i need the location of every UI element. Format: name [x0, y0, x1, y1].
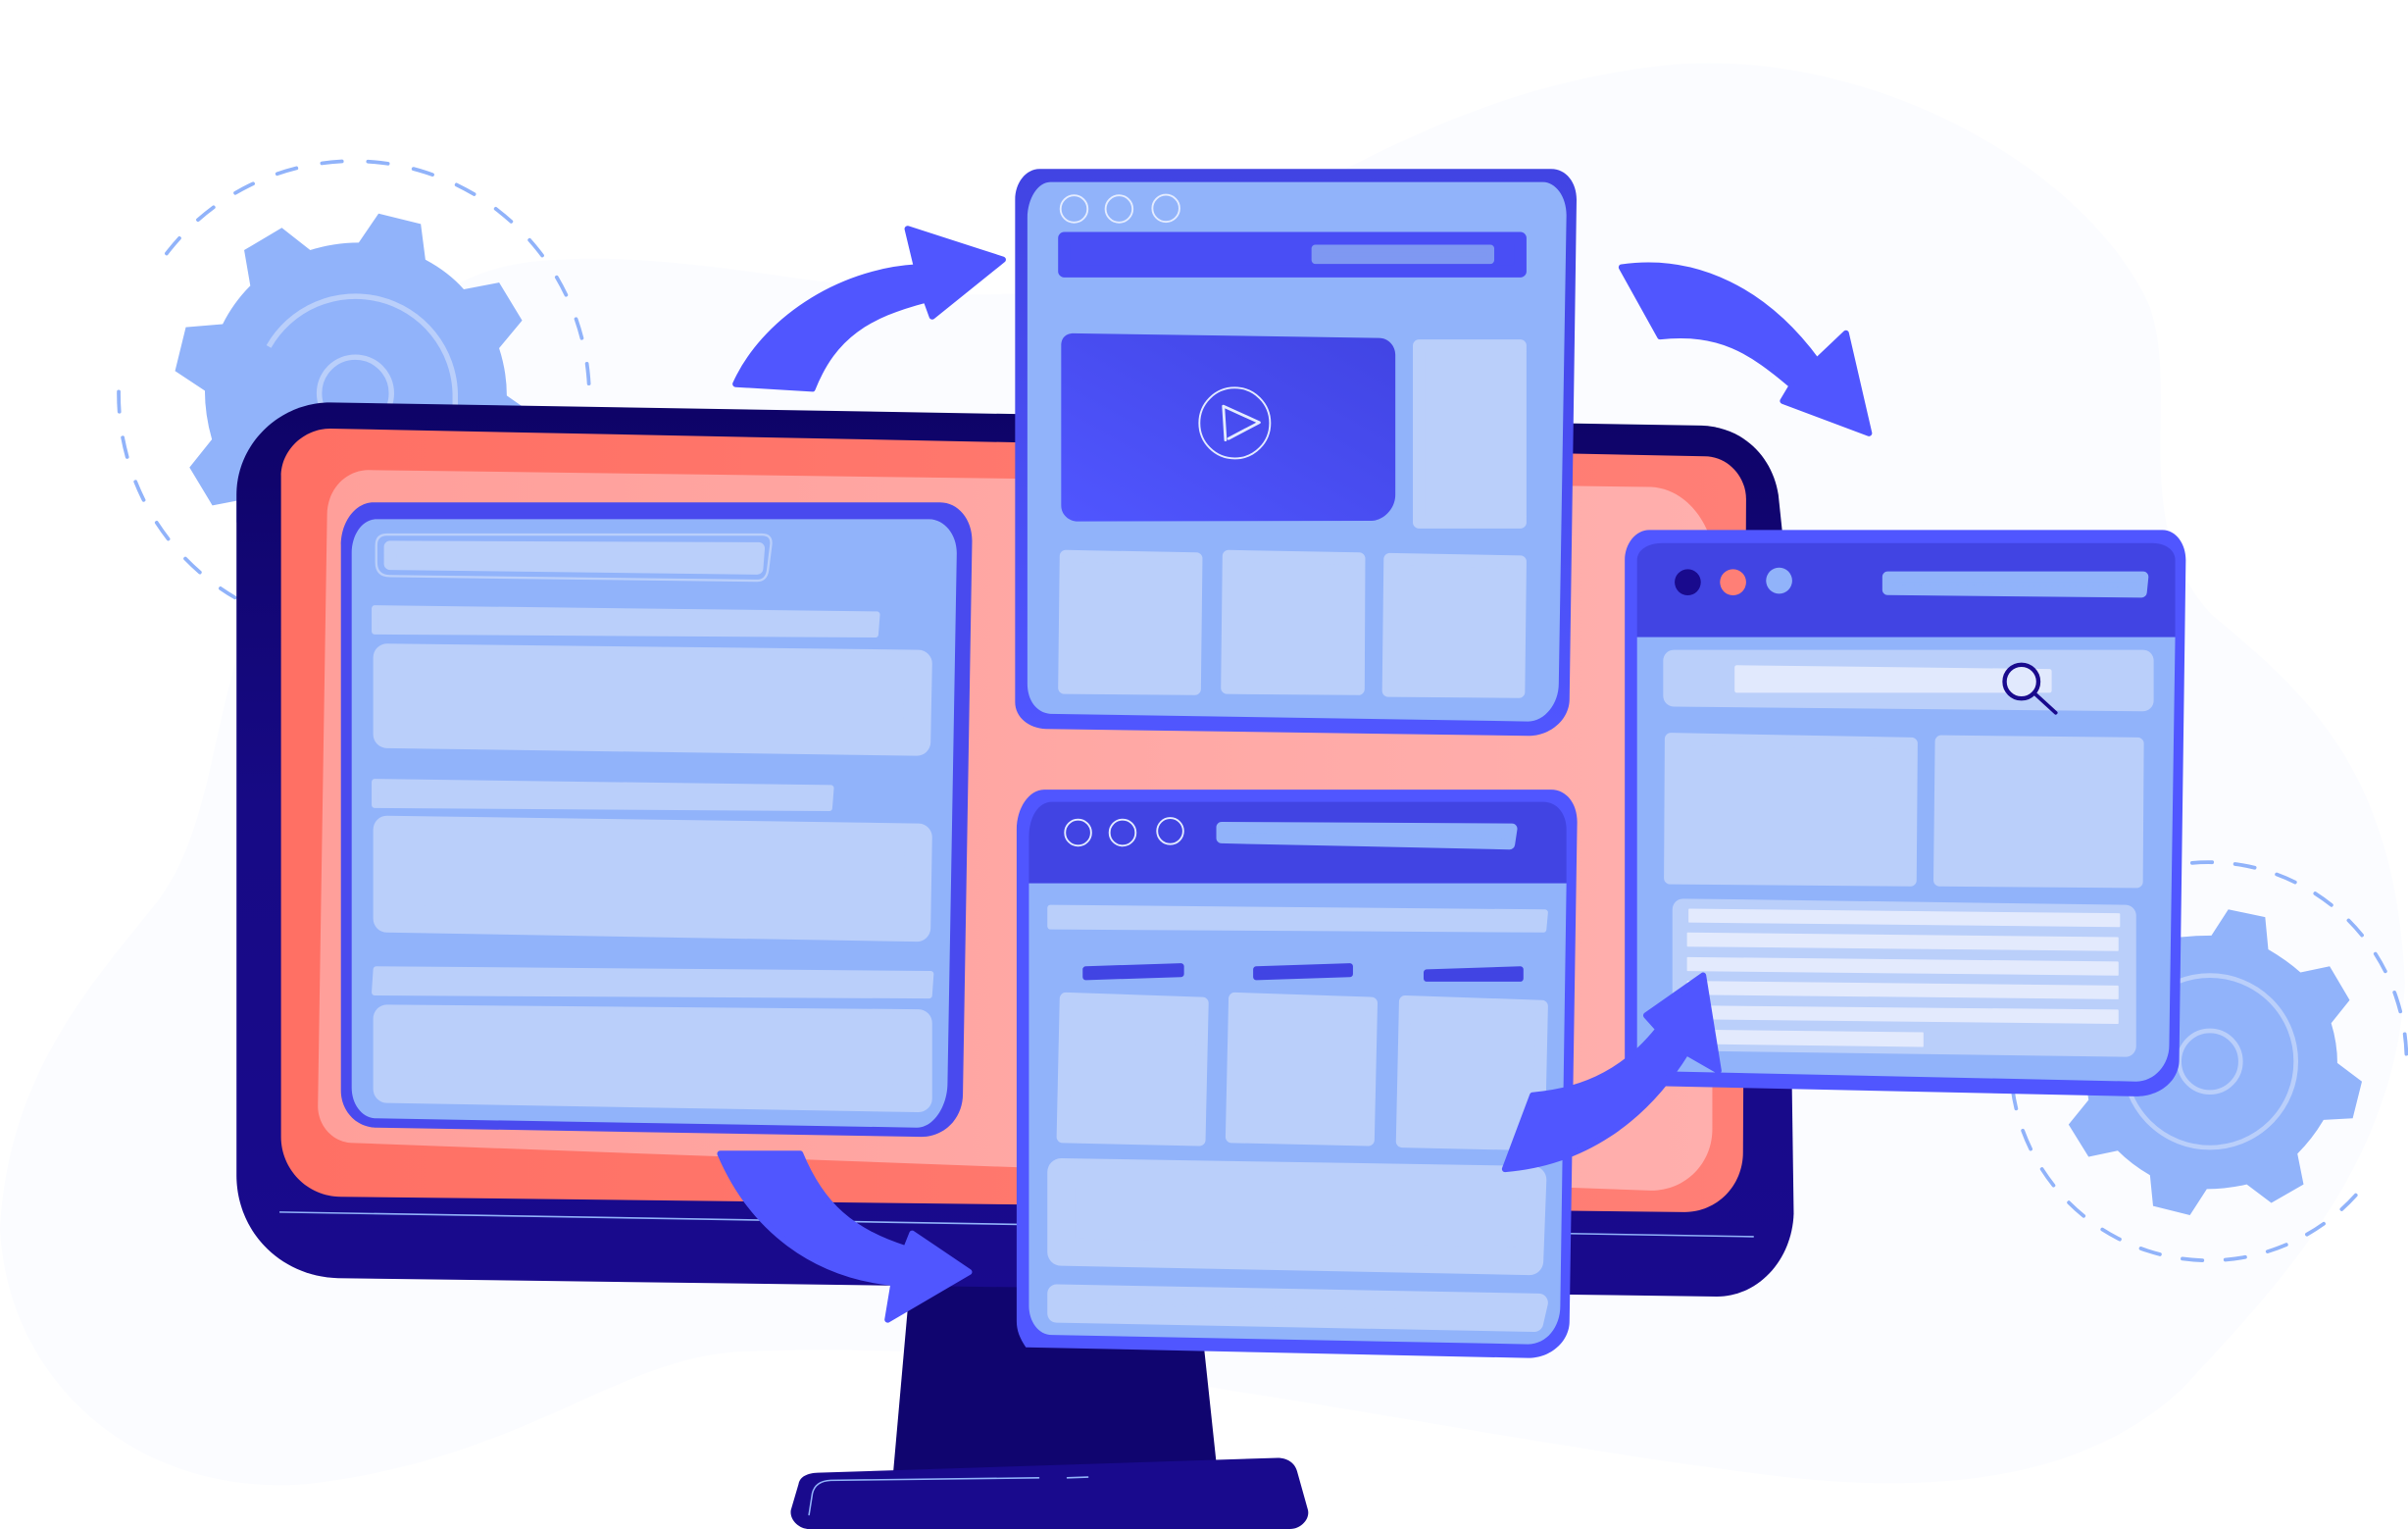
toolbar	[1064, 238, 1521, 272]
base plate	[790, 1457, 1308, 1529]
gear: bottom right	[2012, 862, 2406, 1260]
frame	[1625, 530, 2185, 1096]
monitor	[236, 402, 1793, 1297]
body	[1637, 637, 2176, 1082]
text lines	[1687, 909, 2120, 1046]
frame	[1015, 169, 1577, 736]
gear body: bottom right	[2069, 909, 2362, 1215]
screen highlight	[318, 470, 1712, 1191]
title bar	[1050, 908, 1545, 930]
tabs	[1085, 966, 1521, 979]
address bar	[1222, 827, 1512, 844]
gear: top left	[119, 161, 589, 597]
heading bar 1	[375, 608, 877, 635]
window controls	[1061, 195, 1179, 223]
heading bar 3	[375, 969, 930, 995]
search outline	[376, 535, 771, 581]
gear body: top left	[176, 214, 529, 523]
text panel	[1683, 909, 2126, 1046]
content block 3	[387, 1018, 919, 1098]
arrow: bottom window to right window	[1505, 976, 1719, 1169]
window: bottom gallery layout	[1017, 790, 1578, 1358]
footer block	[1057, 1294, 1538, 1323]
heading bar 2	[375, 782, 830, 808]
window controls	[1675, 568, 1792, 595]
search panel	[1674, 661, 2143, 700]
icon: magnifier	[2005, 665, 2056, 713]
dashed orbit: bottom right gear	[2012, 862, 2406, 1260]
monitor base	[790, 1457, 1308, 1529]
gear rings: bottom right	[2124, 976, 2296, 1147]
video panel	[1061, 333, 1395, 522]
window: right search layout	[1625, 530, 2185, 1096]
arrow: left window to bottom window	[721, 1153, 969, 1320]
content block 2	[387, 830, 919, 928]
body	[352, 519, 957, 1128]
gear rings: top left	[269, 296, 455, 430]
monitor screen	[281, 429, 1746, 1212]
window: left article layout	[341, 502, 972, 1137]
address bar	[1887, 577, 2143, 592]
arrow: top window to right window	[1622, 266, 1869, 433]
icon: play button	[1199, 387, 1270, 458]
content panels	[1670, 739, 2137, 882]
content block 1	[387, 657, 919, 742]
dashed orbit: top left gear	[119, 161, 589, 597]
search field	[390, 547, 759, 569]
window controls	[1065, 818, 1183, 845]
wide content block	[1061, 1172, 1532, 1261]
frame	[1017, 790, 1578, 1358]
search input	[1737, 668, 2049, 690]
monitor stand	[893, 1275, 1217, 1475]
gallery cards	[1063, 998, 1542, 1145]
header	[1637, 543, 2176, 637]
monitor body	[236, 402, 1793, 1297]
arrow: left window to top window	[735, 229, 1003, 388]
monitor chin line	[279, 1212, 1754, 1237]
base highlight	[809, 1477, 1088, 1514]
thumbnail cards	[1064, 556, 1521, 691]
body	[1028, 182, 1567, 722]
side panel	[1419, 345, 1521, 523]
body	[1028, 884, 1567, 1345]
header	[1028, 802, 1567, 884]
window: top video layout	[1015, 169, 1577, 736]
toolbar field	[1316, 248, 1490, 260]
frame	[341, 502, 972, 1137]
